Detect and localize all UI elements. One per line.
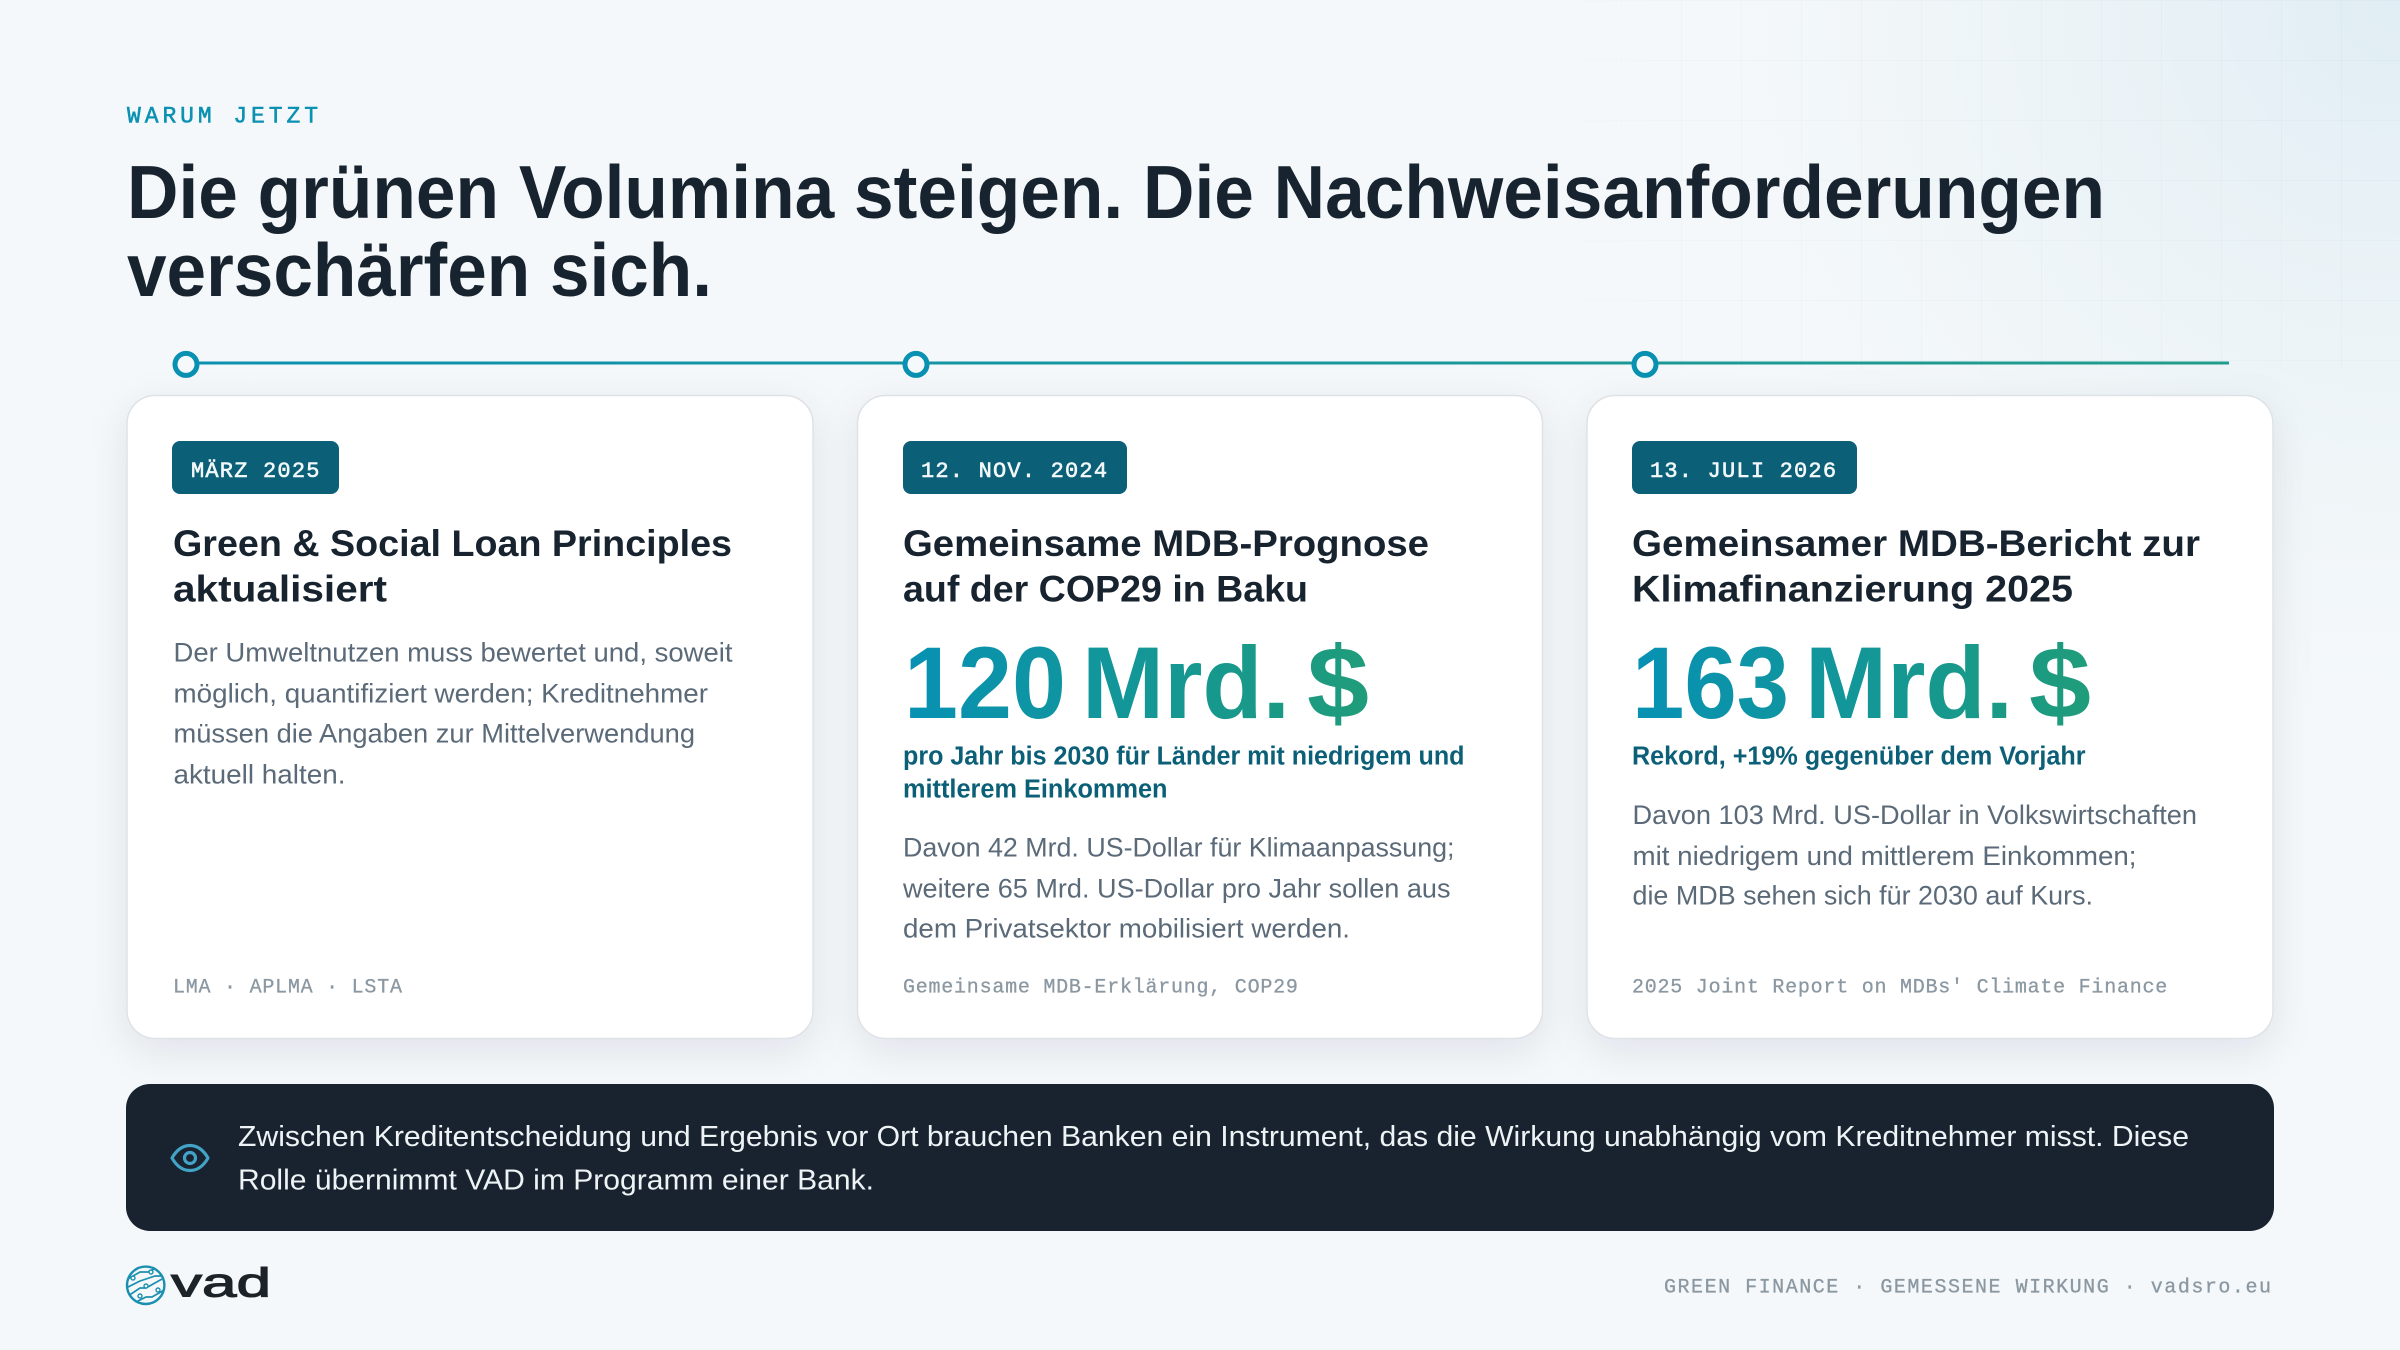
big number: 120 Mrd. $: $ [1307,626,1369,740]
card heading [173,522,732,610]
body text: die MDB sehen sich für 2030 auf Kurs. [1632,880,2093,910]
card heading: Klimafinanzierung 2025 [1632,568,2073,610]
big number: 163 Mrd. $ [1632,626,2091,740]
card heading: Green & Social Loan Principles [173,522,732,564]
source: 2025 Joint Report on MDBs' Climate Finance [1632,976,2168,1000]
card heading: aktualisiert [173,568,388,610]
card heading: Gemeinsame MDB-Prognose [903,522,1429,564]
callout text: Rolle übernimmt VAD im Programm einer Bank. [238,1164,874,1196]
big number: 163 Mrd. $: 163 [1632,626,1789,740]
panel: card 3 [1587,396,2273,1038]
body text: Davon 42 Mrd. US-Dollar für Klimaanpassung; [903,833,1454,863]
body text [174,638,733,789]
wordmark: vad [171,1260,271,1306]
timeline [175,353,2229,375]
big number: 120 Mrd. $ [904,626,1369,740]
subline: pro Jahr bis 2030 für Länder mit niedrigem und [903,742,1464,770]
date badge [903,441,1127,494]
source: Gemeinsame MDB-Erklärung, COP29 [903,976,1299,1000]
date badge: MÄRZ 2025 [191,459,321,484]
big number: 163 Mrd. $: Mrd. [1805,626,2013,740]
timeline node 1 [175,353,197,375]
panel: card 1 [127,396,813,1038]
date badge [172,441,339,494]
icon: globe [126,1266,168,1304]
icon: eye [172,1146,208,1170]
subline: mittlerem Einkommen [903,776,1168,804]
body text: weitere 65 Mrd. US-Dollar pro Jahr sollen aus [902,873,1450,903]
title: verschärfen sich. [127,228,712,312]
big number: 120 Mrd. $: 120 [904,626,1066,740]
body text: aktuell halten. [174,759,346,789]
big number: 120 Mrd. $: Mrd. [1082,626,1290,740]
title [127,150,2105,312]
date badge: 13. JULI 2026 [1650,459,1837,484]
body text [1632,800,2197,910]
body text: möglich, quantifiziert werden; Kreditnehmer [174,678,708,708]
callout text [238,1121,2189,1196]
date badge: 12. NOV. 2024 [921,459,1108,484]
body text [902,833,1454,944]
timeline node 2 [905,353,927,375]
body text: Der Umweltnutzen muss bewertet und, soweit [174,638,733,668]
source: LMA · APLMA · LSTA [173,976,403,1000]
card heading [1632,522,2200,610]
subline: Rekord, +19% gegenüber dem Vorjahr [1632,742,2086,770]
card heading [903,522,1429,610]
body text: mit niedrigem und mittlerem Einkommen; [1632,841,2136,871]
timeline node 3 [1634,353,1656,375]
callout [126,1084,2274,1231]
eyebrow: Warum jetzt: WARUM JETZT [127,104,318,130]
body text: müssen die Angaben zur Mittelverwendung [174,719,695,749]
card heading: Gemeinsamer MDB-Bericht zur [1632,522,2200,564]
date badge [1632,441,1857,494]
footer tagline: GREEN FINANCE · GEMESSENE WIRKUNG · vadsro.eu [1664,1276,2272,1300]
big number: 163 Mrd. $: $ [2029,626,2091,740]
title: Die grünen Volumina steigen. Die Nachweisanforderungen [127,150,2105,234]
callout text: Zwischen Kreditentscheidung und Ergebnis vor Ort brauchen Banken ein Instrument, das die Wirkung unabhängig vom Kreditnehmer misst. Diese [238,1121,2189,1153]
card heading: auf der COP29 in Baku [903,568,1308,610]
panel: card 2 [858,396,1542,1038]
logo: vad [126,1265,268,1306]
body text: Davon 103 Mrd. US-Dollar in Volkswirtschaften [1632,800,2197,830]
subline [903,742,1464,804]
body text: dem Privatsektor mobilisiert werden. [903,914,1350,944]
